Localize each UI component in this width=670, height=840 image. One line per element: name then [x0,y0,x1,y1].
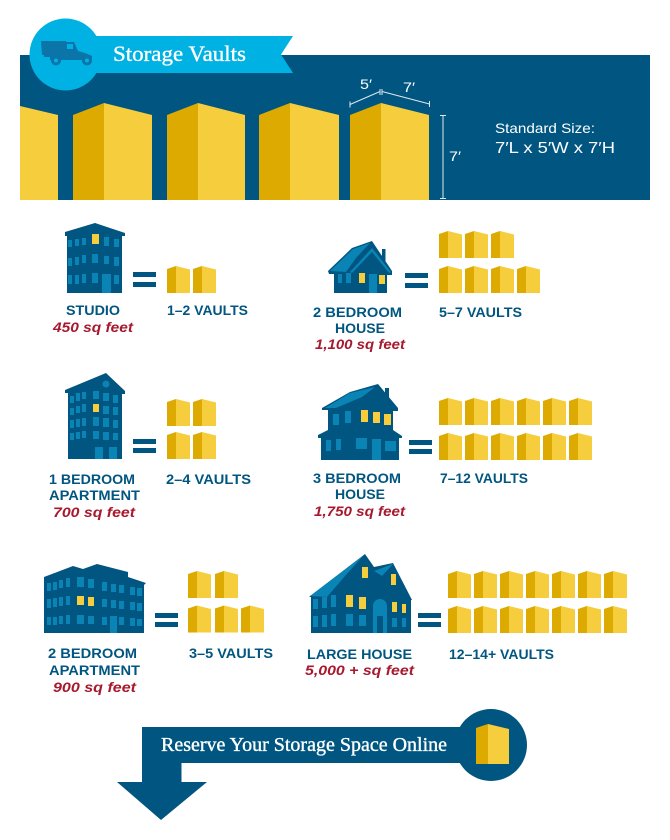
dimension label: length: 7′ [403,79,415,95]
equals sign [405,273,428,288]
vault count: 2–4 VAULTS [166,472,251,487]
label: 2 BEDROOM [313,305,402,320]
square footage: 1,750 sq feet [314,504,406,519]
equals sign [133,272,156,287]
vault count: 12–14+ VAULTS [449,647,554,662]
vault count: 5–7 VAULTS [439,305,522,320]
truck badge circle [30,18,102,90]
group: studio [52,223,248,335]
label: LARGE HOUSE [307,647,412,662]
icon: studio building [65,223,125,293]
badge circle [455,709,527,781]
icon: large house [309,554,412,633]
square footage: 700 sq feet [53,505,136,520]
label: 3 BEDROOM [313,471,401,486]
group: 2 bedroom house [313,231,540,352]
vaults [167,399,216,459]
standard size text [495,120,615,157]
vaults [439,231,540,293]
square footage: 1,100 sq feet [315,337,406,352]
vault count: 7–12 VAULTS [440,471,528,486]
label: STUDIO [66,303,120,318]
equals sign [133,439,156,453]
icon: truck [41,41,92,66]
vault: cropped left [20,106,58,200]
vault: third [167,103,245,200]
vault: fourth [259,103,339,200]
label: 1 BEDROOM [49,472,135,487]
icon: 2 bedroom house [328,241,392,293]
vaults [188,571,264,632]
group: 1 bedroom apartment [49,373,251,520]
label: HOUSE [335,487,385,502]
equals sign [418,613,441,627]
call to action [117,709,527,820]
label [313,305,402,336]
vaults [167,266,216,293]
square footage: 5,000 + sq feet [305,663,415,678]
label: APARTMENT [49,663,141,678]
label: 2 BEDROOM [48,646,137,661]
label [48,646,141,678]
standard size text: 7′L x 5′W x 7′H [495,140,615,157]
standard size text: Standard Size: [495,120,595,136]
vaults [448,571,627,633]
icon: 3 bedroom house [318,384,402,460]
vault: second [73,103,152,200]
banner background [20,55,650,200]
vault: fifth [350,103,429,200]
title ribbon [85,36,293,73]
dimension lines [350,89,446,198]
label [313,471,401,502]
label [49,472,141,503]
label: APARTMENT [49,488,141,503]
vault count: 3–5 VAULTS [189,646,273,661]
icon: 1 bedroom apartment building [65,373,125,459]
group: large house [305,554,627,678]
icon: 2 bedroom apartment building [44,564,146,633]
title: Storage Vaults [113,41,246,66]
vault count: 1–2 VAULTS [167,303,248,318]
label: HOUSE [335,321,385,336]
vaults [439,398,592,460]
equals sign [409,440,432,454]
call to action text: Reserve Your Storage Space Online [161,735,447,756]
icon: vault [476,724,509,764]
panel: storage vault header [20,18,650,200]
arrow banner [117,727,470,820]
group: 2 bedroom apartment [44,564,273,695]
dimension label: height: 7′ [449,148,461,164]
square footage: 900 sq feet [53,680,137,695]
dimension label: width: 5′ [360,76,372,92]
group: 3 bedroom house [313,384,592,519]
square footage: 450 sq feet [52,320,134,335]
equals sign [155,613,178,627]
